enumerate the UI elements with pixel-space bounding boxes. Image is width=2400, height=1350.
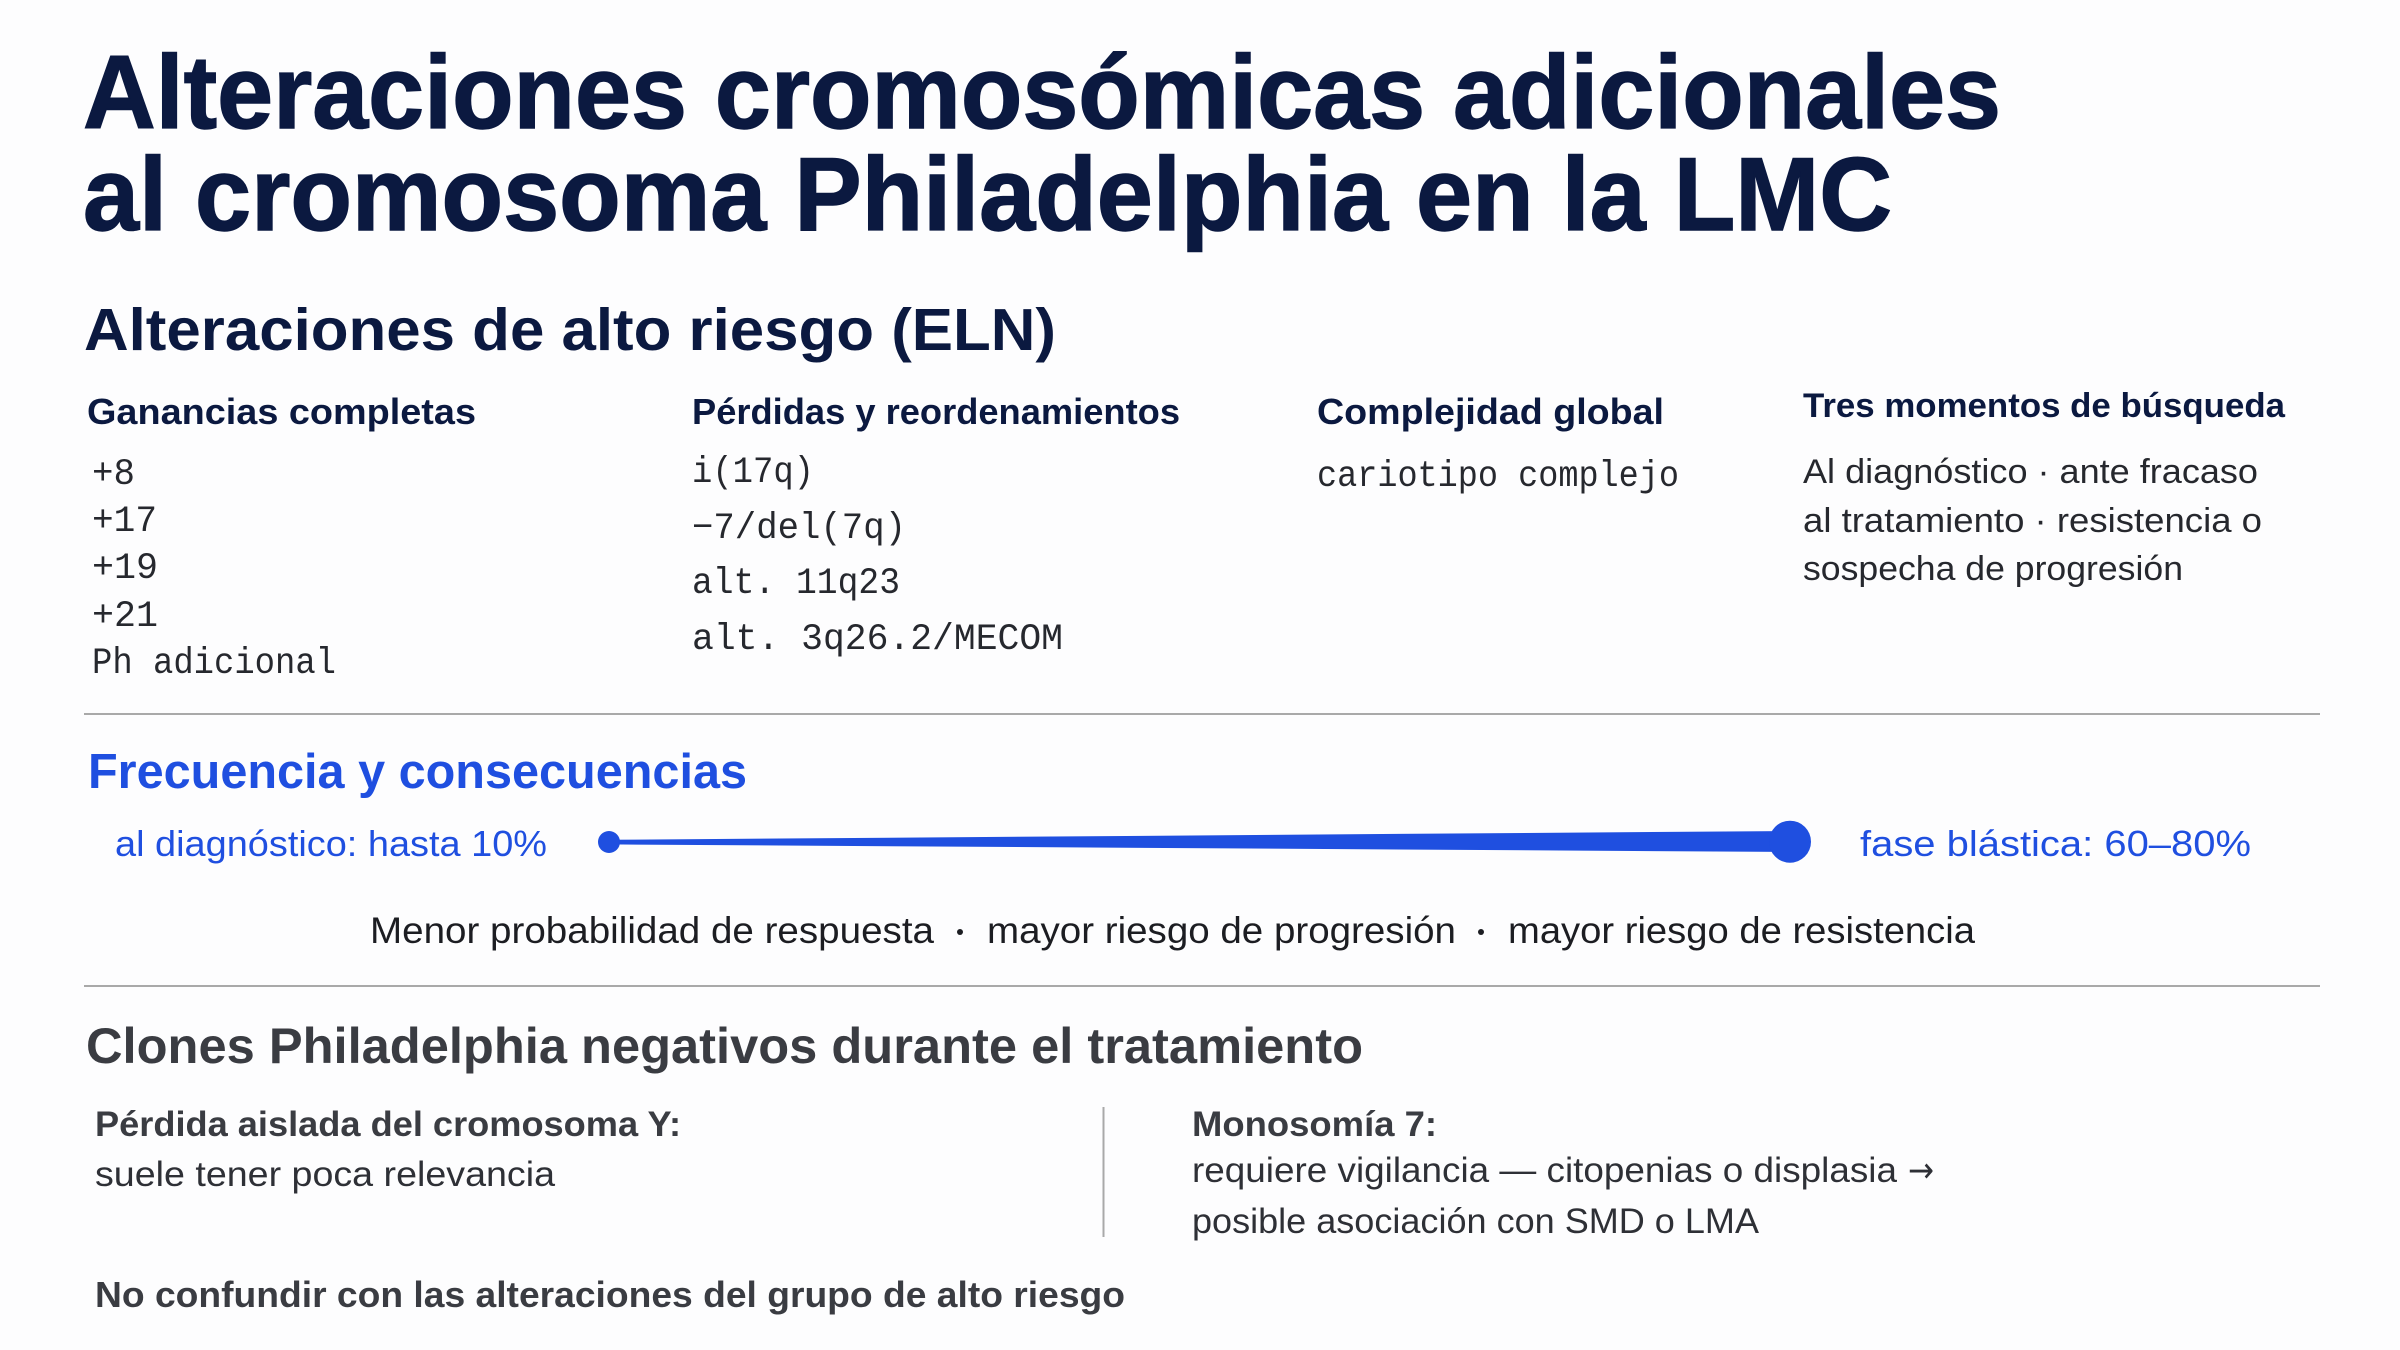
- list: losses: alt. 3q26.2/MECOM: [692, 619, 1063, 661]
- column heading: moments: Tres momentos de búsqueda: [1803, 387, 2286, 425]
- consequences line: Menor probabilidad de respuesta: [370, 910, 934, 951]
- list: losses: [692, 452, 1063, 661]
- moments text: sospecha de progresión: [1803, 550, 2183, 588]
- section heading: high risk: Alteraciones de alto riesgo (ELN): [84, 297, 1056, 363]
- block: monosomy 7: posible asociación con SMD o LMA: [1192, 1202, 1760, 1241]
- column heading: losses: Pérdidas y reordenamientos: [692, 391, 1180, 432]
- list: gains: [92, 454, 336, 685]
- block: monosomy 7: requiere vigilancia — citopenias o displasia: [1192, 1151, 1898, 1190]
- title: [83, 35, 2001, 253]
- panel: full gains: [87, 391, 476, 685]
- list: gains: +8: [92, 454, 135, 496]
- label: at diagnosis: al diagnóstico: hasta 10%: [115, 823, 547, 864]
- block: loss of Y: Pérdida aislada del cromosoma Y:: [95, 1105, 681, 1144]
- block: monosomy 7: →: [1908, 1151, 1934, 1191]
- list: gains: Ph adicional: [92, 643, 336, 685]
- list: losses: i(17q): [692, 452, 814, 494]
- panel: three search moments: [1803, 387, 2286, 588]
- consequences line: mayor riesgo de progresión: [987, 910, 1456, 951]
- consequences line: [370, 910, 1975, 951]
- panel: frequency and consequences: [88, 745, 2251, 951]
- label: blast phase: fase blástica: 60–80%: [1860, 823, 2251, 864]
- panel: Philadelphia negative clones: [86, 1018, 1934, 1315]
- panel: losses and rearrangements: [692, 391, 1180, 661]
- list: losses: −7/del(7q): [692, 508, 906, 550]
- list: gains: +19: [92, 548, 158, 590]
- consequences line: mayor riesgo de resistencia: [1508, 910, 1975, 951]
- note: do not confuse: No confundir con las alteraciones del grupo de alto riesgo: [95, 1274, 1125, 1315]
- title: al cromosoma Philadelphia en la LMC: [83, 137, 1892, 253]
- section heading: clones: Clones Philadelphia negativos durante el tratamiento: [86, 1018, 1363, 1074]
- block: monosomy 7: Monosomía 7:: [1192, 1105, 1437, 1144]
- moments text: [1803, 453, 2262, 588]
- block: monosomy 7: [1192, 1105, 1934, 1241]
- panel: global complexity: [1317, 391, 1679, 498]
- title: Alteraciones cromosómicas adicionales: [83, 35, 2001, 151]
- moments text: Al diagnóstico · ante fracaso: [1803, 453, 2258, 491]
- block: loss of Y: [95, 1105, 681, 1194]
- list: losses: alt. 11q23: [692, 563, 900, 605]
- column heading: complexity: Complejidad global: [1317, 391, 1664, 432]
- column heading: gains: Ganancias completas: [87, 391, 476, 432]
- list: gains: +17: [92, 501, 157, 543]
- moments text: al tratamiento · resistencia o: [1803, 502, 2262, 540]
- complex karyotype: cariotipo complejo: [1317, 456, 1679, 498]
- chart: frequency tapered line: [598, 821, 1811, 863]
- list: gains: +21: [92, 596, 158, 638]
- section heading: frequency: Frecuencia y consecuencias: [88, 745, 747, 799]
- block: loss of Y: suele tener poca relevancia: [95, 1155, 556, 1194]
